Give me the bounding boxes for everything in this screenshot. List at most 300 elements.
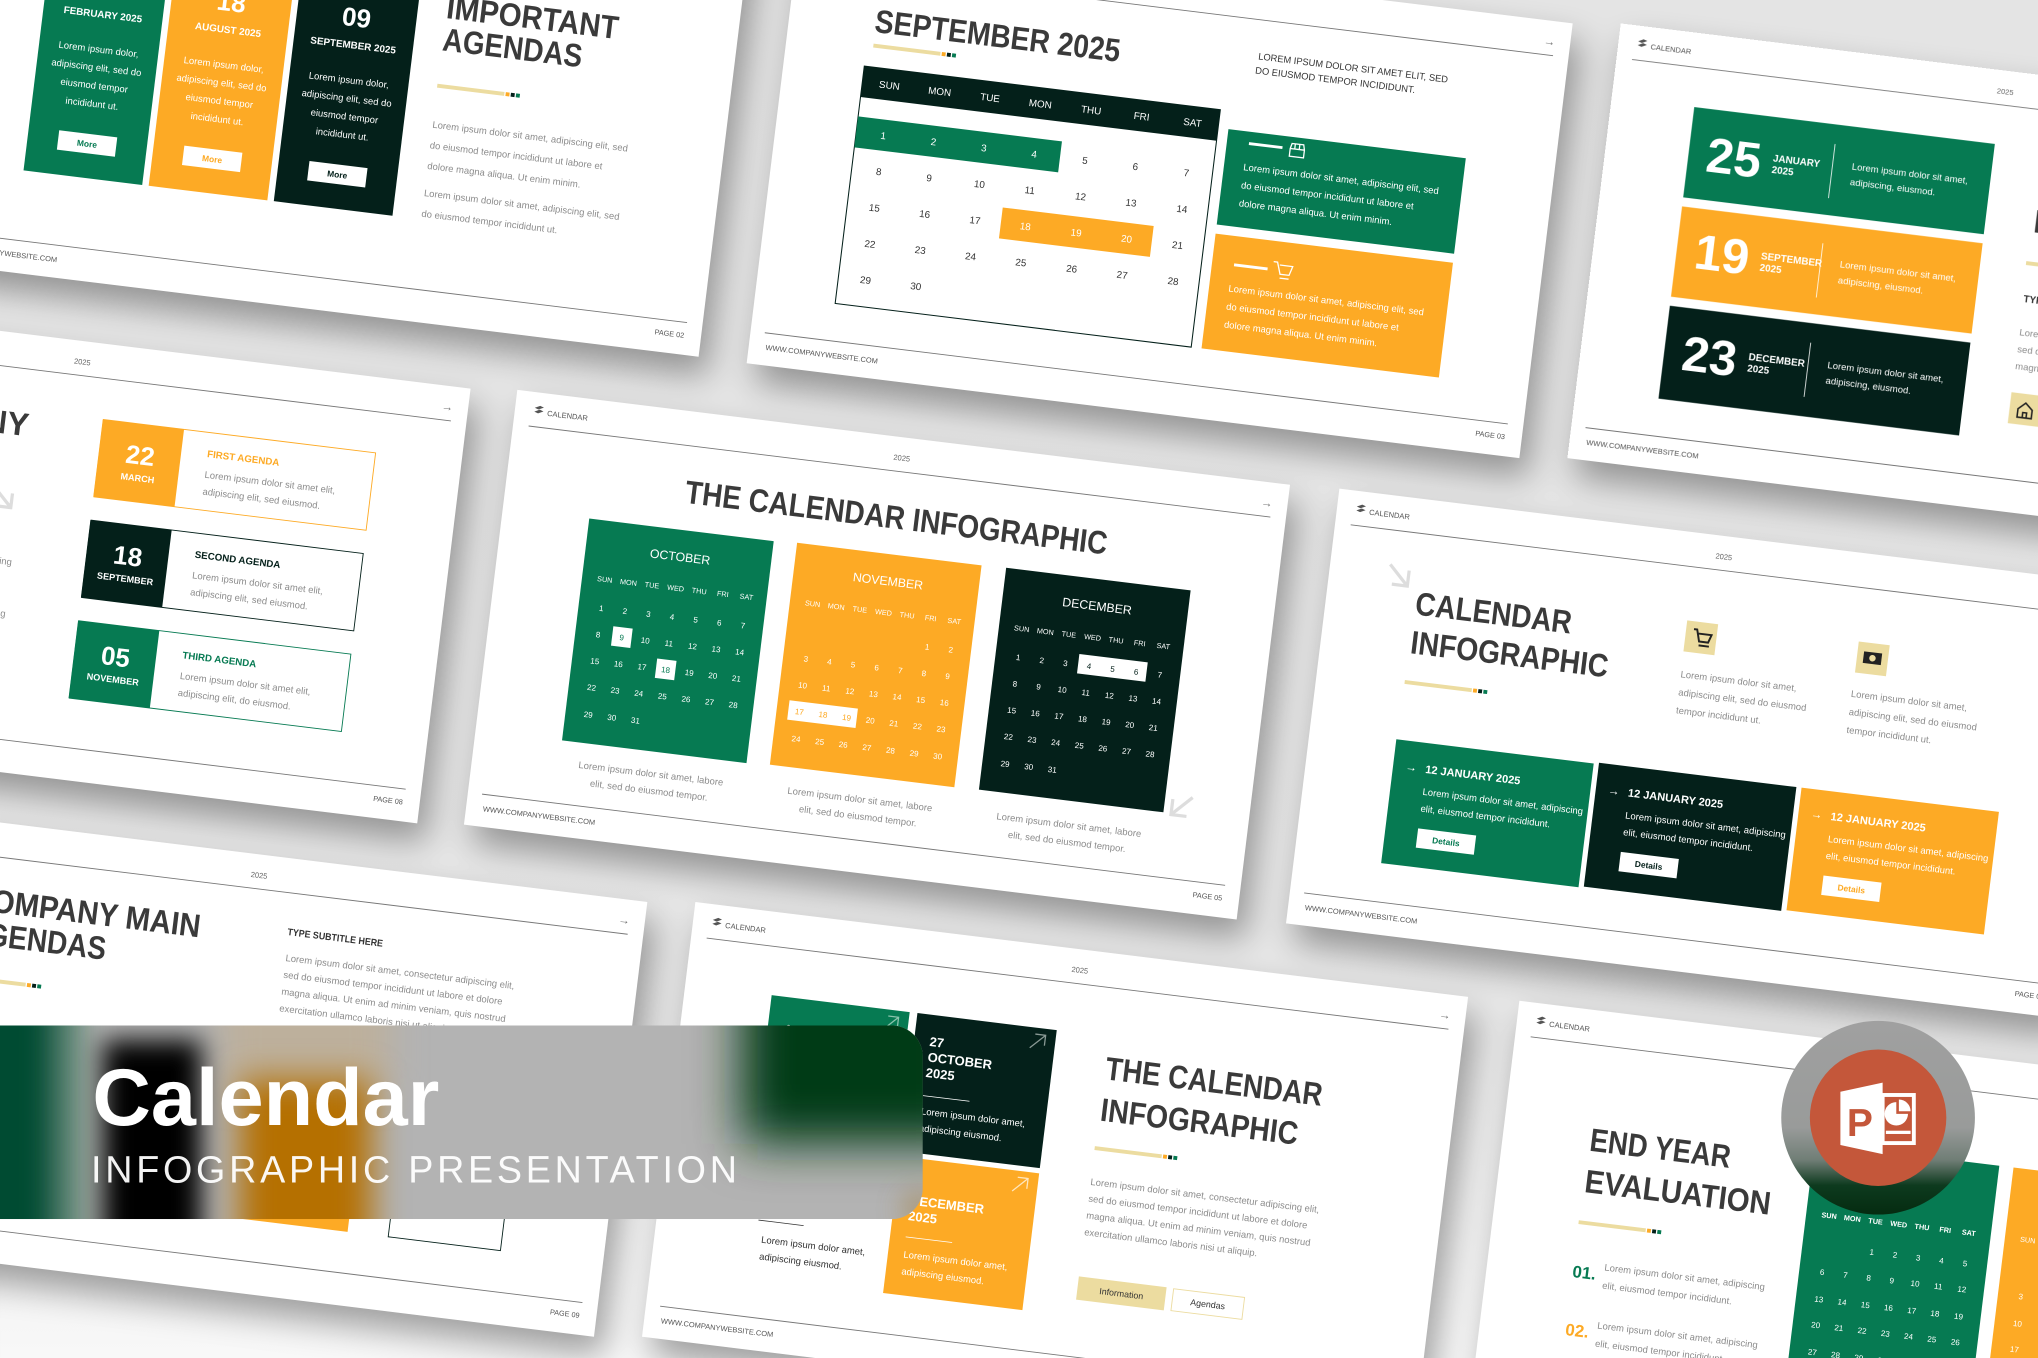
calendar: october: 23 — [610, 686, 621, 696]
calendar: october: 26 — [681, 694, 691, 705]
footer — [1583, 428, 2038, 538]
panel: slide important agendas — [0, 0, 752, 357]
calendar: november: 17 — [794, 707, 805, 717]
card: february: Lorem ipsum dolor, — [58, 40, 139, 60]
calendar: december: 1 — [1015, 653, 1021, 663]
calendar: november: 25 — [815, 737, 825, 747]
header — [1632, 38, 2038, 151]
footer: PAGE 08 — [373, 794, 403, 806]
card: august: adipiscing elit, sed do — [176, 73, 267, 94]
row: january: 25 — [1703, 128, 1764, 189]
calendar: november: 5 — [850, 660, 856, 670]
calendar: december: 16 — [1030, 709, 1041, 719]
item 02 — [1563, 1317, 1758, 1358]
footer: PAGE 03 — [1475, 429, 1505, 441]
body text: Lorem ipsum dolor sit amet, consectetur adipiscing elit, — [285, 953, 515, 992]
agenda: second: 18 — [112, 539, 144, 573]
header: CALENDAR — [1650, 42, 1692, 56]
card: february: More — [76, 138, 98, 150]
card: dark: elit, eiusmod tempor incididunt. — [1623, 827, 1753, 854]
calendar: november: 8 — [921, 669, 927, 678]
card: september: Lorem ipsum dolor, — [308, 70, 389, 91]
row: september: 2025 — [1759, 263, 1783, 277]
calendar: november: 10 — [798, 681, 808, 691]
card: dark: adipiscing eiusmod. — [918, 1123, 1002, 1144]
calendar: november: TUE — [852, 604, 868, 615]
panel: green note — [1217, 129, 1466, 254]
footer: PAGE 02 — [654, 327, 685, 340]
calendar: green: 20 — [1811, 1320, 1821, 1330]
calendar table: 1 — [880, 131, 887, 142]
calendar: november: 7 — [898, 666, 904, 676]
panel: orange note: dolore magna aliqua. Ut enim minim. — [1223, 320, 1378, 349]
agenda: first: 22 — [124, 439, 156, 472]
calendar: green: 10 — [1910, 1279, 1921, 1289]
caption: Lorem ipsum dolor amet, — [761, 1235, 866, 1258]
row: january: adipiscing, eiusmod. — [1849, 177, 1936, 199]
calendar: october: 18 — [661, 665, 671, 675]
card: february: eiusmod tempor — [60, 77, 128, 96]
calendar table: 10 — [973, 179, 986, 191]
calendar: november — [770, 543, 982, 787]
text fragments — [0, 551, 13, 620]
calendar: december: 10 — [1057, 685, 1068, 695]
row: december: 2025 — [1747, 364, 1770, 377]
right column fragments — [2006, 203, 2038, 433]
header: 2025 — [250, 870, 268, 881]
calendar: december: WED — [1084, 632, 1102, 643]
calendar: december: 25 — [1074, 741, 1085, 751]
footer — [480, 794, 1225, 904]
calendar: december: 5 — [1110, 665, 1116, 674]
calendar: october: 16 — [613, 659, 624, 669]
arrow — [0, 487, 13, 508]
footer: PAGE 05 — [1192, 890, 1223, 903]
calendar: december: 12 — [1104, 691, 1115, 701]
heading: INFOGRAPHIC — [1099, 1092, 1300, 1152]
row: january: Lorem ipsum dolor sit amet, — [1851, 162, 1969, 187]
card: orange: DECEMBER — [909, 1193, 985, 1217]
calendar: green: 5 — [1962, 1259, 1968, 1269]
card: orange — [1787, 788, 1999, 934]
card: dark — [1584, 763, 1796, 911]
calendar table: 11 — [1024, 185, 1035, 197]
card: green: 12 JANUARY 2025 — [1425, 764, 1521, 787]
card: september — [274, 0, 422, 216]
body text: exercitation ullamco laboris nisi ut aliquip. — [1084, 1227, 1258, 1259]
heading — [0, 880, 203, 978]
calendar: december: 30 — [1024, 762, 1034, 772]
calendar table: TUE — [979, 92, 1001, 105]
footer: WWW.COMPANYWEBSITE.COM — [660, 1316, 774, 1339]
calendar: october: OCTOBER — [649, 546, 711, 568]
agenda: second — [81, 520, 363, 631]
card: green — [755, 995, 910, 1150]
text columns: Lorem ipsum dolor sit amet, — [1850, 689, 1968, 714]
row: september: SEPTEMBER — [1760, 251, 1823, 270]
calendar table: THU — [1080, 104, 1102, 118]
accent bar — [0, 975, 41, 989]
calendar: green: 23 — [1880, 1329, 1891, 1339]
calendar: october: SUN — [597, 574, 613, 585]
panel: slide company main agendas — [0, 807, 647, 1337]
calendar: october: WED — [667, 583, 685, 594]
footer — [762, 333, 1508, 443]
card: orange: Lorem ipsum dolor sit amet, adipiscing — [1827, 834, 1989, 865]
card: dark: 12 JANUARY 2025 — [1627, 788, 1724, 811]
calendar: december: TUE — [1061, 629, 1077, 640]
calendar: october: 13 — [711, 644, 722, 655]
calendar table: 5 — [1082, 156, 1089, 167]
captions: elit, sed do eiusmod tempor. — [589, 778, 708, 804]
panel: slide agenda list — [0, 294, 471, 823]
calendar table: 20 — [1120, 234, 1133, 246]
footer: PAGE 09 — [549, 1307, 580, 1320]
row: december: Lorem ipsum dolor sit amet, — [1827, 360, 1944, 385]
calendar table: MON — [928, 86, 952, 99]
row: january: JANUARY — [1772, 153, 1821, 170]
icon: cash — [1855, 641, 1890, 676]
card: september: 09 — [340, 1, 373, 34]
calendar table: 7 — [1183, 168, 1190, 180]
calendar table: 8 — [875, 167, 883, 179]
text columns: tempor incididunt ut. — [1846, 725, 1932, 746]
calendar: green: THU — [1914, 1222, 1930, 1232]
card: august: eiusmod tempor — [185, 92, 254, 111]
calendar: green: 22 — [1857, 1326, 1868, 1336]
calendar: green: 16 — [1883, 1303, 1894, 1313]
icon: powerpoint badge: P — [1847, 1102, 1873, 1145]
text columns: adipiscing elit, sed do eiusmod — [1678, 687, 1807, 714]
row: september: 19 — [1691, 224, 1753, 286]
agenda: second: adipiscing elit, sed eiusmod. — [190, 587, 308, 612]
calendar: december: 4 — [1086, 662, 1092, 671]
caption: adipiscing eiusmod. — [759, 1251, 842, 1273]
calendar: december: 11 — [1081, 688, 1091, 698]
heading: THE CALENDAR — [1104, 1050, 1325, 1113]
calendar table: 6 — [1132, 162, 1139, 173]
calendar: october — [562, 519, 774, 763]
calendar table: 22 — [864, 239, 876, 251]
panel: slide dates list — [1567, 23, 2038, 553]
calendar: green: 25 — [1927, 1335, 1937, 1345]
card: orange: 2025 — [907, 1208, 938, 1227]
calendar: october: 17 — [637, 662, 647, 672]
card: orange: → — [1810, 808, 1823, 822]
button: agendas — [1171, 1289, 1245, 1319]
card: august: AUGUST 2025 — [194, 21, 262, 40]
row: december: adipiscing, eiusmod. — [1825, 376, 1911, 397]
card: orange — [883, 1156, 1039, 1310]
subtitle: TYPE SUBTITLE HERE — [287, 927, 384, 950]
calendar table: 16 — [918, 209, 931, 221]
captions: elit, sed do eiusmod tempor. — [798, 804, 917, 829]
calendar: green: 26 — [1950, 1337, 1961, 1348]
panel: slide end year evaluation — [1466, 1001, 2038, 1358]
calendar: green: 9 — [1889, 1276, 1895, 1286]
panel: orange note: Lorem ipsum dolor sit amet, adipiscing elit, sed — [1228, 283, 1424, 318]
agenda: second: Lorem ipsum dolor sit amet elit, — [192, 570, 324, 597]
footer: WWW.COMPANYWEBSITE.COM — [482, 804, 596, 827]
calendar: december: 26 — [1098, 744, 1108, 754]
calendar: green: 12 — [1957, 1285, 1967, 1295]
accent bar — [1094, 1146, 1177, 1160]
header: → — [1438, 1008, 1451, 1023]
calendar: december: 18 — [1078, 714, 1088, 724]
card: orange: elit, eiusmod tempor incididunt. — [1825, 851, 1956, 878]
body text: Lorem ipsum dolor sit amet, consectetur adipiscing elit, — [1090, 1177, 1320, 1216]
calendar: december — [979, 568, 1191, 812]
icon: cart — [1272, 262, 1293, 280]
calendar: october: 10 — [640, 636, 651, 646]
calendar: green: 21 — [1834, 1323, 1844, 1333]
calendar: december: 2 — [1039, 656, 1045, 665]
body text: Lorem ipsum dolor sit amet, adipiscing elit, sed — [432, 120, 628, 155]
calendar: november: 4 — [827, 657, 833, 667]
calendar: green: SUN — [1821, 1210, 1837, 1221]
calendar: green: TUE — [1868, 1216, 1883, 1227]
calendar: november: 3 — [803, 654, 809, 664]
calendar table: FRI — [1133, 111, 1150, 124]
calendar: october: TUE — [644, 580, 660, 591]
header: → — [441, 400, 454, 414]
calendar table — [835, 66, 1220, 347]
panel: green note: Lorem ipsum dolor sit amet, adipiscing elit, sed — [1243, 162, 1439, 197]
agenda: first: MARCH — [120, 471, 155, 485]
footer: WWW.COMPANYWEBSITE.COM — [1586, 438, 1699, 460]
heading: THE CALENDAR INFOGRAPHIC — [683, 474, 1110, 561]
body text: magna aliqua. Ut enim ad minim veniam, quis nostrud — [281, 987, 506, 1025]
calendar: november: FRI — [924, 613, 937, 623]
header — [529, 405, 1274, 517]
item 01: Lorem ipsum dolor sit amet, adipiscing — [1604, 1262, 1765, 1293]
calendar: november: SAT — [947, 616, 962, 626]
calendar: october: 8 — [595, 630, 601, 640]
calendar: october: 24 — [634, 689, 644, 699]
card: green: Details — [1432, 835, 1461, 849]
item 01: 01. — [1571, 1262, 1597, 1284]
calendar table: 9 — [926, 173, 933, 185]
heading — [1409, 586, 1615, 684]
calendar: november: 9 — [945, 672, 951, 681]
panel: slide calendar infographic cards — [1286, 489, 2038, 1018]
agenda: first: adipiscing elit, sed eiusmod. — [202, 487, 321, 512]
icon: cart — [1683, 620, 1718, 655]
calendar table: 3 — [980, 143, 988, 155]
agenda: first — [93, 419, 376, 530]
calendar: november: 6 — [874, 663, 880, 673]
calendar table: 13 — [1125, 198, 1138, 210]
calendar: green: 6 — [1819, 1268, 1825, 1277]
footer: WWW.COMPANYWEBSITE.COM — [765, 343, 878, 366]
header: → — [618, 913, 631, 928]
card: august: Lorem ipsum dolor, — [183, 55, 264, 76]
calendar: november: 30 — [933, 752, 943, 762]
card: green: Lorem ipsum dolor sit amet, adipiscing — [1422, 787, 1584, 817]
calendar: november: 26 — [838, 740, 849, 750]
heading: INFOGRAPHIC — [1409, 624, 1610, 684]
calendar: november: WED — [875, 607, 892, 618]
agenda: third: NOVEMBER — [86, 671, 140, 688]
card: september: eiusmod tempor — [310, 107, 379, 127]
calendar: november: 29 — [909, 749, 920, 759]
footer — [0, 1211, 582, 1320]
calendar: november: 11 — [822, 684, 831, 694]
body text: sed do eiusmod tempor incididunt ut labore et dolore — [283, 970, 503, 1008]
card: dark: Details — [1634, 859, 1663, 872]
item 02: Lorem ipsum dolor sit amet, adipiscing — [1597, 1321, 1758, 1351]
calendar table: 2 — [930, 137, 937, 149]
panel: slide the calendar infographic — [464, 390, 1290, 920]
card: dark: 27 — [929, 1034, 945, 1051]
panel: orange note — [1202, 234, 1453, 378]
calendar: december: 20 — [1125, 720, 1135, 730]
calendar: november: MON — [827, 601, 845, 612]
header — [707, 917, 1452, 1029]
calendar: november: 12 — [845, 686, 855, 696]
calendar table: 30 — [910, 281, 922, 293]
card: orange: Lorem ipsum dolor amet, — [903, 1250, 1008, 1273]
footer: WWW.COMPANYWEBSITE.COM — [1304, 903, 1418, 926]
calendar: october: 9 — [619, 633, 625, 643]
heading — [1583, 1122, 1778, 1222]
card: dark: Lorem ipsum dolor amet, — [920, 1106, 1026, 1130]
calendar table: 14 — [1176, 204, 1188, 216]
calendar: november: 1 — [924, 642, 930, 652]
row: september: Lorem ipsum dolor sit amet, — [1839, 260, 1956, 285]
header: CALENDAR — [725, 921, 767, 935]
header: 2025 — [1996, 86, 2014, 97]
subheading text: LOREM IPSUM DOLOR SIT AMET ELIT, SED — [1258, 51, 1449, 86]
header: 2025 — [893, 453, 911, 464]
calendar: october: 30 — [607, 713, 617, 723]
calendar: october: 6 — [717, 618, 723, 628]
button: information: Information — [1099, 1286, 1144, 1301]
footer — [0, 231, 687, 341]
calendar: december: 28 — [1145, 749, 1156, 760]
calendar: october: 21 — [731, 674, 742, 684]
panel: slide september 2025 — [747, 0, 1573, 458]
calendar: december: 27 — [1121, 747, 1132, 757]
calendar: november: 13 — [868, 689, 879, 699]
calendar: december: 15 — [1007, 706, 1017, 716]
row: september — [1671, 206, 1983, 334]
heading — [441, 0, 621, 78]
card: green: 12 — [784, 1021, 800, 1038]
panel: orange note: do eiusmod tempor incididunt ut labore et — [1226, 302, 1400, 334]
card: february: adipiscing elit, sed do — [51, 57, 142, 79]
footer — [1302, 893, 2038, 1003]
body text: dolore magna aliqua. Ut enim minim. — [427, 161, 581, 191]
calendar: november: 14 — [892, 692, 903, 702]
footer — [0, 698, 406, 807]
banner — [0, 1026, 923, 1220]
card: august: More — [202, 153, 223, 165]
text columns — [1675, 668, 1980, 753]
calendar: december: SAT — [1156, 641, 1171, 651]
calendar: october: 22 — [587, 683, 597, 693]
card: september: incididunt ut. — [315, 126, 369, 144]
card: green — [1381, 739, 1594, 887]
calendar table: SUN — [878, 80, 900, 93]
calendar: december: 7 — [1157, 670, 1163, 680]
calendar: green: 18 — [1930, 1309, 1940, 1319]
header: CALENDAR — [547, 409, 589, 423]
calendar: december: 23 — [1027, 735, 1038, 745]
agenda: second: SECOND AGENDA — [194, 550, 281, 571]
card: september: adipiscing elit, sed do — [301, 88, 392, 110]
calendar: green: 13 — [1814, 1295, 1824, 1305]
card: august — [149, 0, 297, 200]
calendar: green: 19 — [1954, 1312, 1964, 1322]
calendar: october: 31 — [630, 716, 641, 726]
calendar: october: 2 — [622, 607, 628, 616]
card: dark: → — [1607, 784, 1620, 798]
calendar: green: 2 — [1892, 1250, 1898, 1260]
accent bar — [1578, 1220, 1661, 1234]
row: december: 23 — [1679, 326, 1740, 387]
calendar: october: THU — [691, 586, 707, 596]
calendar: december: 8 — [1012, 679, 1018, 689]
calendar: october: MON — [619, 577, 637, 588]
agenda: second: SEPTEMBER — [96, 570, 154, 587]
row: january — [1683, 107, 1995, 234]
calendar table: 15 — [868, 203, 881, 215]
header — [1351, 503, 2038, 616]
card: dark: 2025 — [925, 1065, 955, 1083]
arrow — [1388, 564, 1410, 586]
calendar: december: THU — [1108, 635, 1124, 646]
calendar: december: 31 — [1047, 765, 1058, 775]
calendar table: SAT — [1183, 117, 1202, 130]
header: CALENDAR — [1369, 508, 1411, 522]
calendar: green: 24 — [1904, 1332, 1914, 1342]
calendar: october: SAT — [739, 592, 754, 602]
calendar: green: 4 — [1939, 1256, 1945, 1266]
card: february: incididunt ut. — [65, 96, 119, 113]
card: orange: adipiscing eiusmod. — [901, 1266, 985, 1287]
calendar: november: 28 — [885, 746, 896, 756]
calendar: october: 19 — [684, 668, 695, 678]
heading: CALENDAR — [1413, 586, 1574, 641]
agenda: first: FIRST AGENDA — [206, 449, 280, 469]
calendar: december: 6 — [1133, 667, 1139, 677]
calendar: december: MON — [1036, 626, 1054, 637]
calendar table: 21 — [1171, 240, 1184, 252]
agenda: third: 05 — [99, 640, 132, 673]
calendar: october: 20 — [708, 671, 718, 681]
header — [0, 310, 454, 421]
agenda: third: THIRD AGENDA — [182, 650, 257, 670]
calendar: october: 15 — [590, 656, 600, 666]
calendar: november: 16 — [939, 698, 950, 708]
calendar: green: 7 — [1843, 1271, 1849, 1280]
calendar: green: 11 — [1934, 1282, 1943, 1292]
item 01: elit, eiusmod tempor incididunt. — [1602, 1281, 1732, 1307]
body text: do eiusmod tempor incididunt ut labore et — [429, 140, 603, 172]
heading: AGENDAS — [441, 21, 584, 74]
body text: do eiusmod tempor incididunt ut. — [421, 209, 558, 236]
calendar table: 26 — [1065, 264, 1078, 276]
calendar: november: 15 — [916, 695, 926, 705]
subheading text: DO EIUSMOD TEMPOR INCIDIDUNT. — [1255, 65, 1416, 96]
card: september: More — [327, 168, 348, 181]
card: orange: 12 JANUARY 2025 — [1830, 811, 1926, 835]
calendar table: 24 — [964, 251, 977, 263]
panel: green note: dolore magna aliqua. Ut enim minim. — [1238, 198, 1393, 228]
calendar: october: 1 — [598, 604, 605, 613]
calendar: green: 8 — [1866, 1273, 1872, 1283]
